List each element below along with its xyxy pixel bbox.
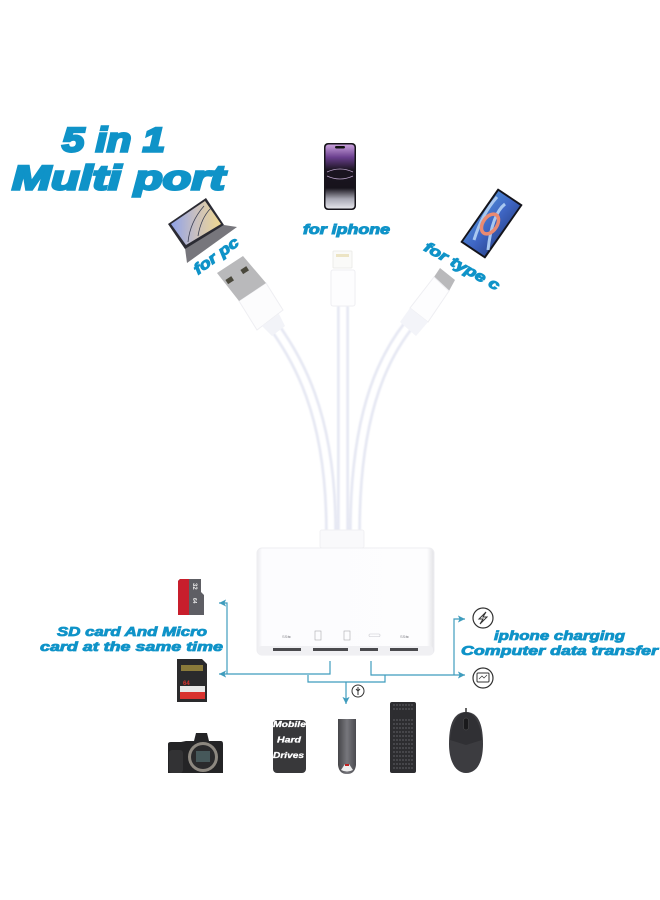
icon: iphone <box>324 143 356 210</box>
label: charging and data text: Computer data transfer <box>461 643 659 658</box>
port slots <box>273 648 418 651</box>
icon: keyboard <box>390 702 416 773</box>
label: for type c: for type c <box>421 240 502 294</box>
icon: mobile hard drive: Mobile <box>273 719 306 729</box>
icon: mobile hard drive: Hard <box>277 734 302 744</box>
connector arrows <box>219 603 465 704</box>
label: charging and data text: iphone charging <box>494 628 625 643</box>
adapter collar <box>320 530 364 548</box>
title: Multi port <box>12 160 227 198</box>
icon: SD card <box>177 659 207 702</box>
icon: laptop <box>168 198 237 263</box>
icon: SD card: 64 <box>183 681 190 687</box>
Lightning plug <box>331 251 355 306</box>
label: SD card text: card at the same time <box>40 639 223 654</box>
cables <box>272 306 408 532</box>
port labels <box>282 631 409 640</box>
icon: mobile hard drive: Drives <box>273 750 304 760</box>
port labels: SS⇆ <box>400 634 409 639</box>
icon: micro SD card: 64 <box>191 598 197 604</box>
icon: micro SD card: 32 <box>191 583 197 590</box>
icon: mobile hard drive <box>273 719 306 773</box>
icon: type-c phone <box>461 189 522 258</box>
icon: charging <box>473 608 493 628</box>
label: charging and data text <box>461 628 659 658</box>
icon: USB stick <box>338 719 356 774</box>
Type-C plug <box>400 268 455 336</box>
port labels: SS⇆ <box>282 634 291 639</box>
icon: mouse <box>449 708 483 773</box>
label: for iphone: for iphone <box>303 221 390 237</box>
icon: micro SD card <box>178 579 204 615</box>
title <box>12 122 227 198</box>
USB-A plug <box>217 256 285 336</box>
label: SD card text: SD card And Micro <box>57 624 207 639</box>
label: SD card text <box>40 624 223 654</box>
label: for pc: for pc <box>190 233 243 278</box>
icon: USB symbol <box>352 685 364 697</box>
icon: data transfer <box>473 668 493 688</box>
adapter hub <box>257 548 434 655</box>
icon: camera <box>168 733 223 773</box>
title: 5 in 1 <box>62 122 165 160</box>
